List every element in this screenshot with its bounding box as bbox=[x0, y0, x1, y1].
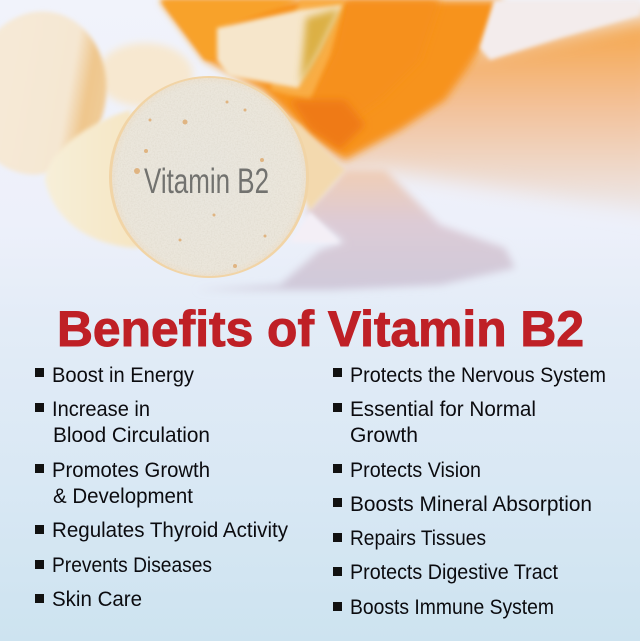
tablet behind bbox=[190, 62, 345, 210]
item: vision: Protects Vision bbox=[350, 459, 481, 482]
item: nervous system: Protects the Nervous System bbox=[350, 364, 606, 387]
item: blood circulation: Blood Circulation bbox=[53, 424, 210, 447]
left blurred tablet bbox=[0, 0, 119, 186]
item: energy: Boost in Energy bbox=[52, 364, 194, 387]
light wedge by shadow bbox=[290, 212, 340, 243]
item: blood circulation: Increase in bbox=[52, 398, 150, 421]
main tablet bbox=[109, 76, 310, 278]
photo: vitamin tablets and orange bottle bbox=[0, 0, 640, 290]
right benefits list bbox=[333, 364, 606, 619]
tablet speckles bbox=[134, 100, 266, 268]
item: mineral absorption: Boosts Mineral Absorption bbox=[350, 493, 592, 516]
left benefits list bbox=[35, 364, 288, 611]
item: normal growth: Essential for Normal bbox=[350, 398, 536, 421]
shadow on table bbox=[195, 170, 515, 290]
middle tablet bbox=[45, 110, 170, 248]
item: thyroid: Regulates Thyroid Activity bbox=[52, 519, 288, 542]
item: blood circulation bbox=[35, 398, 210, 447]
item: normal growth bbox=[333, 398, 536, 447]
back tablet bbox=[97, 43, 193, 107]
title: Benefits of Vitamin B2 bbox=[57, 301, 584, 357]
item: growth and development: Promotes Growth bbox=[52, 459, 210, 482]
tablet engraved label: Vitamin B2 bbox=[144, 162, 269, 201]
item: immune system: Boosts Immune System bbox=[350, 596, 554, 619]
tablet inside bottle bbox=[217, 5, 342, 88]
item: growth and development bbox=[35, 459, 210, 508]
item: normal growth: Growth bbox=[350, 424, 418, 447]
item: digestive tract: Protects Digestive Tract bbox=[350, 561, 558, 584]
orange pill bottle bbox=[160, 0, 640, 214]
item: diseases: Prevents Diseases bbox=[52, 554, 212, 577]
item: tissues: Repairs Tissues bbox=[350, 527, 486, 550]
item: skin care: Skin Care bbox=[52, 588, 142, 611]
window of light on bottle bbox=[480, 0, 640, 60]
item: growth and development: & Development bbox=[53, 485, 193, 508]
